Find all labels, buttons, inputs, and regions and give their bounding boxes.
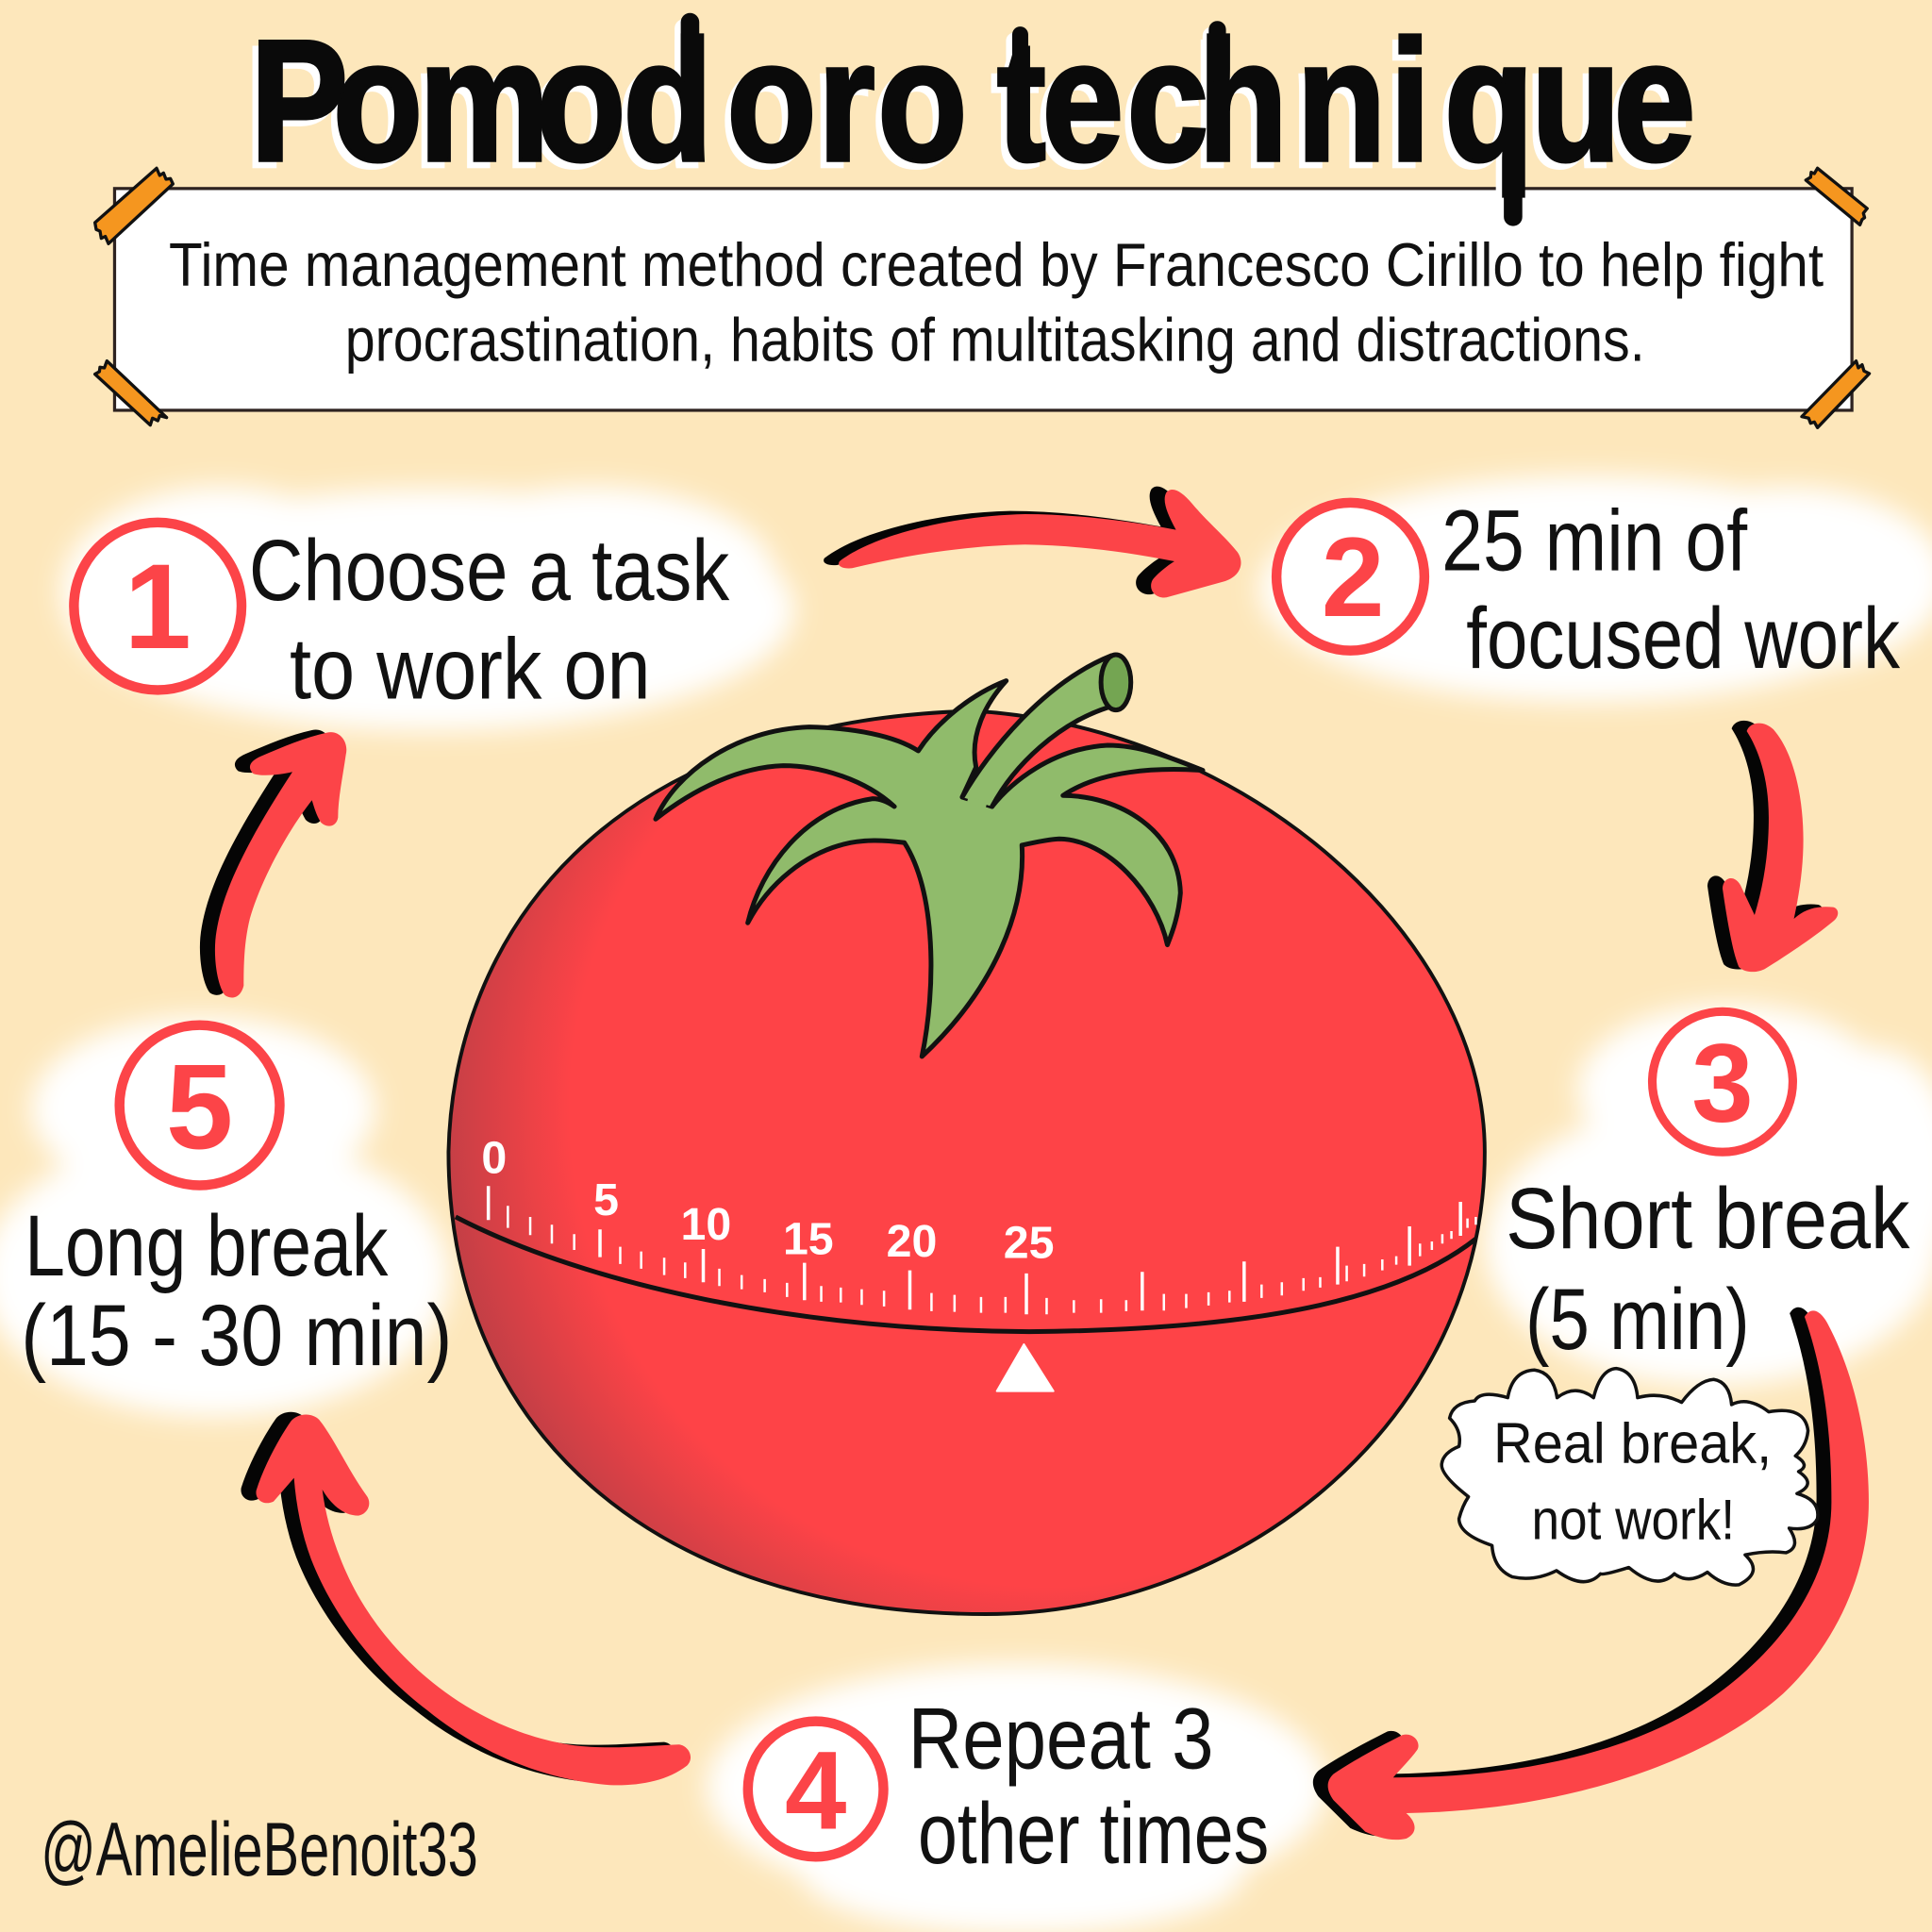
note card bbox=[114, 189, 1852, 410]
badge 4 bbox=[748, 1722, 883, 1857]
arrow: step 3 to step 4 bbox=[1313, 1307, 1869, 1840]
bubble text bbox=[1493, 1411, 1772, 1551]
dial numbers: 0 bbox=[481, 1132, 507, 1183]
panel: step 5 bbox=[0, 1017, 452, 1417]
stem bbox=[962, 656, 1111, 807]
badge 3 bbox=[1653, 1011, 1792, 1152]
step text bbox=[1506, 1171, 1910, 1368]
dial numbers bbox=[481, 1132, 1054, 1269]
panel: step 3 bbox=[1485, 1004, 1932, 1386]
badge 2 bbox=[1276, 503, 1424, 651]
arrow: step 4 to step 5 bbox=[241, 1412, 691, 1785]
dial numbers: 20 bbox=[887, 1216, 937, 1267]
step text: 25 min of bbox=[1441, 493, 1748, 590]
badge 2: 2 bbox=[1322, 514, 1385, 641]
dial scale bbox=[456, 1186, 1475, 1332]
bubble text: Real break, bbox=[1493, 1411, 1772, 1474]
step text: to work on bbox=[290, 622, 651, 718]
panel: step 2 bbox=[1259, 475, 1932, 702]
badge 1 bbox=[74, 523, 242, 690]
calyx and stem bbox=[656, 655, 1203, 1057]
backdrop bbox=[0, 1017, 450, 1417]
stem base blend bbox=[968, 799, 987, 805]
arrow: step 2 to step 3 bbox=[1707, 721, 1838, 972]
dial numbers: 5 bbox=[593, 1174, 619, 1225]
tape: left corners bbox=[95, 168, 173, 425]
panel: step 1 bbox=[61, 487, 794, 731]
dial numbers: 25 bbox=[1004, 1218, 1054, 1269]
badge 5 bbox=[120, 1025, 279, 1185]
badge 3: 3 bbox=[1691, 1022, 1754, 1145]
callout: real break bbox=[1441, 1369, 1818, 1585]
badge 1: 1 bbox=[125, 540, 192, 675]
panel: definition note bbox=[95, 168, 1870, 427]
step text bbox=[908, 1690, 1269, 1882]
step text: Repeat 3 bbox=[908, 1690, 1214, 1787]
step text bbox=[249, 523, 729, 718]
step text bbox=[21, 1198, 452, 1384]
dial numbers: 10 bbox=[681, 1199, 731, 1250]
stem cut end bbox=[1101, 655, 1131, 710]
bubble text: not work! bbox=[1532, 1488, 1735, 1551]
badge 4: 4 bbox=[785, 1728, 846, 1852]
definition text bbox=[169, 230, 1824, 375]
tomato timer bbox=[448, 655, 1485, 1614]
backdrop bbox=[1259, 475, 1932, 702]
backdrop bbox=[1485, 1004, 1932, 1386]
step text: Long break bbox=[25, 1198, 389, 1294]
panel: step 4 bbox=[706, 1663, 1327, 1932]
tomato body bbox=[448, 711, 1485, 1614]
signature: @AmelieBenoit33 bbox=[41, 1807, 478, 1892]
step text bbox=[1441, 493, 1900, 687]
minor ticks bbox=[508, 1206, 1475, 1314]
step text: (15 - 30 min) bbox=[21, 1288, 452, 1384]
step text: Choose a task bbox=[249, 523, 729, 619]
badge 5: 5 bbox=[166, 1040, 233, 1174]
arrow: step 1 to step 2 bbox=[824, 487, 1241, 597]
arrow: step 5 to step 1 bbox=[200, 729, 346, 998]
backdrop bbox=[706, 1663, 1327, 1932]
definition text: procrastination, habits of multitasking and distractions. bbox=[345, 306, 1645, 375]
pointer triangle bbox=[997, 1344, 1054, 1391]
step text: (5 min) bbox=[1525, 1272, 1750, 1368]
backdrop bbox=[61, 487, 794, 731]
title text: Pomodoro technique bbox=[250, 4, 1695, 197]
calyx leaves bbox=[656, 681, 1203, 1057]
dial divider line bbox=[456, 1217, 1475, 1332]
step text: other times bbox=[918, 1786, 1269, 1882]
tape: right corners bbox=[1802, 168, 1870, 427]
dial numbers: 15 bbox=[783, 1214, 834, 1265]
major ticks bbox=[489, 1186, 1460, 1314]
tall strokes bbox=[690, 23, 1513, 217]
cloud bubble bbox=[1441, 1369, 1818, 1585]
